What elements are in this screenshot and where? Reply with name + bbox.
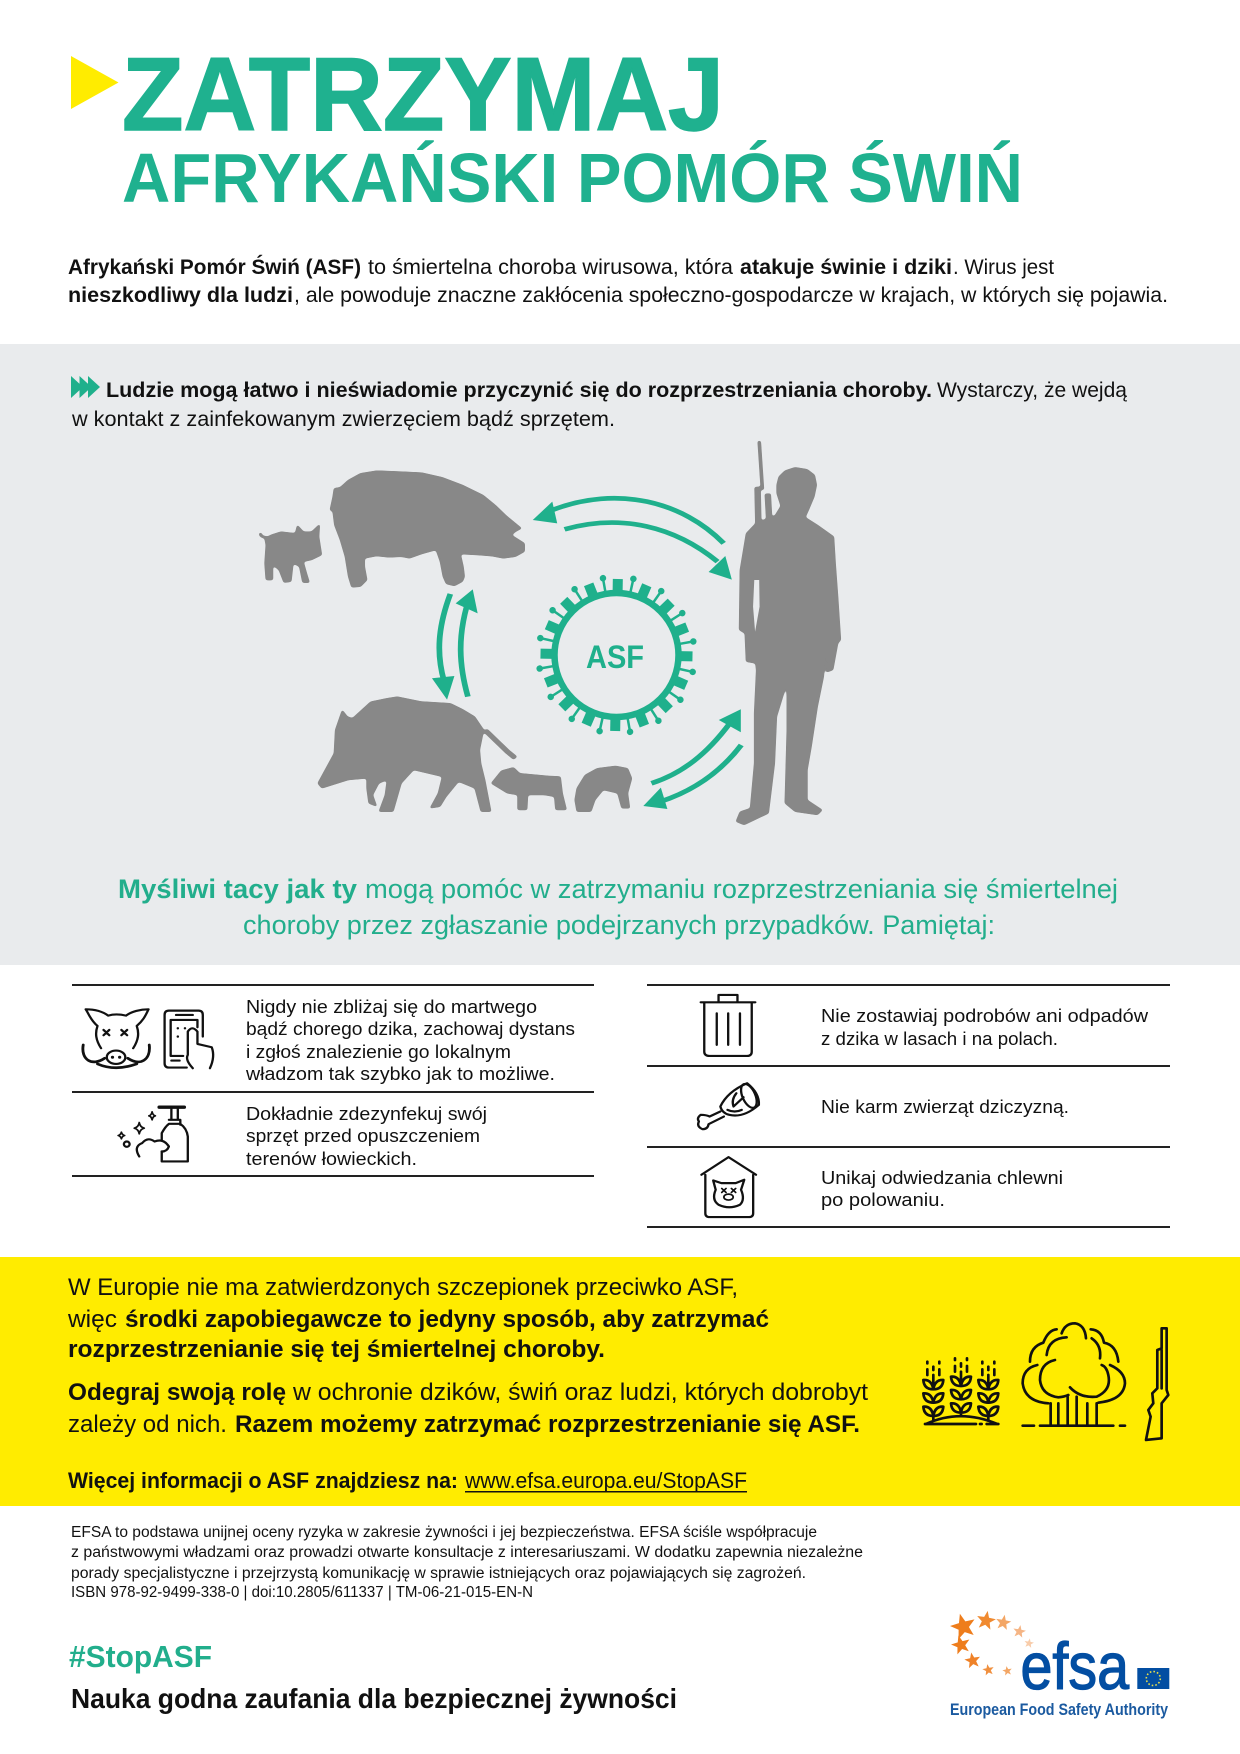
text: disinfect equipment: sprzęt przed opuszczeniem bbox=[246, 1126, 480, 1146]
lead text: Ludzie mogą łatwo i nieświadomie przyczynić się do rozprzestrzeniania choroby. bbox=[106, 379, 932, 402]
text: avoid pig farms: po polowaniu. bbox=[821, 1190, 945, 1210]
text: never approach: Nigdy nie zbliżaj się do martwego bbox=[246, 997, 537, 1017]
icon: yellow triangle bbox=[71, 56, 118, 109]
text: no vaccines: rozprzestrzenianie się tej śmiertelnej choroby. bbox=[68, 1336, 605, 1363]
lead text bbox=[71, 379, 1127, 431]
intro text: Afrykański Pomór Świń (ASF) bbox=[68, 255, 361, 279]
text: more information link bbox=[68, 1468, 747, 1493]
text: avoid pig farms bbox=[821, 1168, 1063, 1210]
text: about EFSA bbox=[71, 1524, 863, 1601]
icon: rifle bbox=[1146, 1328, 1168, 1440]
text: about EFSA: ISBN 978-92-9499-338-0 | doi:10.2805/611337 | TM-06-21-015-EN-N bbox=[71, 1584, 533, 1601]
icon: trees bbox=[1023, 1323, 1125, 1426]
text: disinfect equipment: terenów łowieckich. bbox=[246, 1149, 417, 1169]
icon: ham bbox=[698, 1082, 760, 1129]
green call to action heading: mogą pomóc w zatrzymaniu rozprzestrzeniania się śmiertelnej bbox=[365, 874, 1118, 904]
text: never approach: i zgłoś znalezienie go lokalnym bbox=[246, 1042, 511, 1062]
text: disinfect equipment bbox=[246, 1104, 487, 1169]
text: about EFSA: z państwowymi władzami oraz prowadzi otwarte konsultacje z interesariuszami. W dodatku zapewnia niezależne bbox=[71, 1544, 863, 1561]
icon: dead boar and phone bbox=[83, 1009, 213, 1068]
text: about EFSA: porady specjalistyczne i przejrzystą komunikację w sprawie istniejących oraz pojawiających się zagrożeń. bbox=[71, 1565, 806, 1582]
text: no vaccines bbox=[67, 1274, 769, 1363]
text: no vaccines: środki zapobiegawcze to jedyny sposób, aby zatrzymać bbox=[125, 1306, 769, 1333]
icon: disinfectant bottle bbox=[118, 1107, 188, 1161]
intro text: nieszkodliwy dla ludzi bbox=[68, 284, 293, 307]
title: ZATRZYMAJ bbox=[122, 37, 724, 153]
silhouettes bbox=[260, 441, 841, 825]
slogan: Nauka godna zaufania dla bezpiecznej żywności bbox=[71, 1683, 677, 1714]
transmission diagram bbox=[260, 441, 841, 825]
icon: trash bin bbox=[701, 995, 755, 1056]
intro text: to śmiertelna choroba wirusowa, która bbox=[368, 256, 733, 279]
text: more information link: Więcej informacji o ASF znajdziesz na: bbox=[68, 1468, 458, 1493]
icon: orange stars bbox=[948, 1609, 1035, 1676]
text: offal bbox=[821, 1006, 1149, 1049]
text: play your role: w ochronie dzików, świń oraz ludzi, których dobrobyt bbox=[292, 1379, 868, 1406]
intro text: , ale powoduje znaczne zakłócenia społeczno-gospodarcze w krajach, w których się pojawia. bbox=[294, 284, 1168, 307]
intro text: atakuje świnie i dziki bbox=[740, 256, 952, 279]
icon: triple chevron bbox=[71, 376, 100, 398]
text: offal: Nie zostawiaj podrobów ani odpadów bbox=[821, 1006, 1149, 1026]
text: play your role bbox=[68, 1379, 868, 1438]
intro text: . Wirus jest bbox=[953, 256, 1054, 279]
green call to action heading bbox=[118, 874, 1118, 940]
subtitle: AFRYKAŃSKI POMÓR ŚWIŃ bbox=[122, 139, 1023, 217]
wordmark: efsa bbox=[1020, 1629, 1129, 1703]
icon: wheat field bbox=[923, 1358, 998, 1424]
icon: EU flag bbox=[1137, 1668, 1169, 1689]
icon: ASF virus bbox=[537, 576, 696, 734]
text: no vaccines: W Europie nie ma zatwierdzonych szczepionek przeciwko ASF, bbox=[68, 1274, 738, 1301]
logo: EFSA bbox=[948, 1609, 1169, 1719]
hashtag: #StopASF bbox=[69, 1639, 212, 1674]
text: disinfect equipment: Dokładnie zdezynfekuj swój bbox=[246, 1104, 487, 1124]
text: play your role: Razem możemy zatrzymać rozprzestrzenianie się ASF. bbox=[235, 1411, 860, 1438]
arrows: pig to hunter bbox=[533, 498, 732, 580]
icon: wild boar bbox=[318, 697, 516, 812]
text: about EFSA: EFSA to podstawa unijnej oceny ryzyka w zakresie żywności i jej bezpieczeństwa. EFSA ściśle współpracuje bbox=[71, 1524, 817, 1541]
arrows: boar to hunter bbox=[643, 709, 741, 809]
text: avoid pig farms: Unikaj odwiedzania chlewni bbox=[821, 1168, 1063, 1188]
icon: pig house bbox=[701, 1157, 756, 1217]
panel: grey transmission section bbox=[0, 344, 1240, 965]
icon: piglet bbox=[260, 524, 322, 583]
text: never approach: władzom tak szybko jak to możliwe. bbox=[245, 1064, 555, 1084]
text: play your role: Odegraj swoją rolę bbox=[68, 1379, 286, 1406]
hunter arm gap bbox=[753, 580, 760, 632]
text: more information link: www.efsa.europa.eu/StopASF bbox=[464, 1468, 747, 1493]
text: offal: z dzika w lasach i na polach. bbox=[821, 1029, 1058, 1049]
panel: right advice list bbox=[647, 985, 1170, 1227]
text: no vaccines: więc bbox=[67, 1306, 117, 1333]
text: do not feed: Nie karm zwierząt dziczyzną. bbox=[821, 1097, 1069, 1117]
header bbox=[71, 37, 1023, 217]
text: play your role: zależy od nich. bbox=[68, 1411, 227, 1438]
icon: boar piglet feeding bbox=[575, 766, 632, 812]
authority name: European Food Safety Authority bbox=[950, 1701, 1169, 1719]
text: never approach bbox=[245, 997, 575, 1084]
green call to action heading: choroby przez zgłaszanie podejrzanych przypadków. Pamiętaj: bbox=[243, 910, 995, 940]
icon: ASF virus: ASF bbox=[586, 639, 644, 675]
lead text: w kontakt z zainfekowanym zwierzęciem bądź sprzętem. bbox=[71, 408, 615, 431]
green call to action heading: Myśliwi tacy jak ty bbox=[118, 874, 357, 904]
icon: boar piglet standing bbox=[491, 767, 567, 810]
panel: left advice list bbox=[72, 985, 594, 1176]
icon: hunter with rifle bbox=[736, 441, 841, 825]
panel: yellow band bbox=[0, 1257, 1240, 1506]
arrows: pig to boar bbox=[432, 589, 478, 700]
icon: domestic pig bbox=[330, 471, 525, 587]
intro text bbox=[68, 255, 1168, 307]
lead text: Wystarczy, że wejdą bbox=[937, 379, 1127, 402]
text: never approach: bądź chorego dzika, zachowaj dystans bbox=[246, 1019, 575, 1039]
